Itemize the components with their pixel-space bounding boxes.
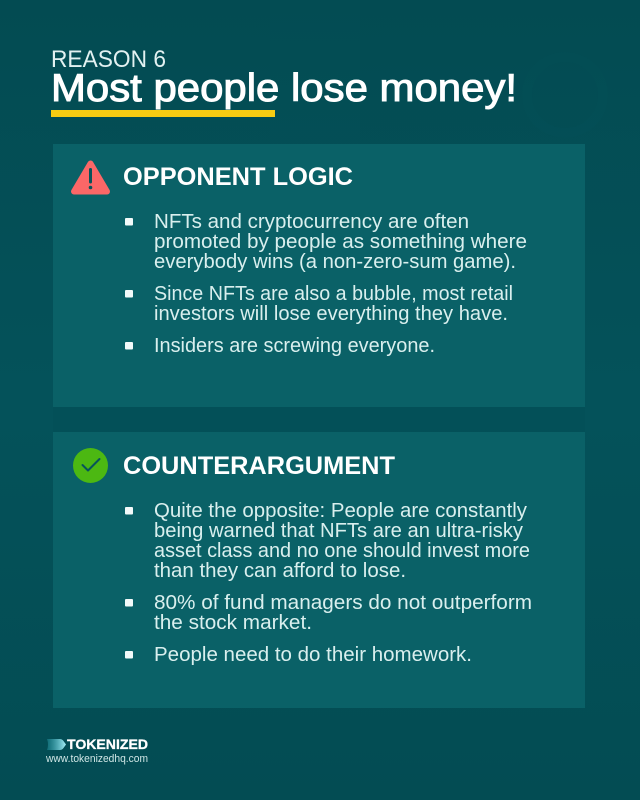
bullet list: opponent logic: Since NFTs are also a bubble, most retail <box>154 283 513 305</box>
bullet list: counterargument: People need to do their homework. <box>154 644 472 666</box>
title block <box>51 46 517 117</box>
bullet list: counterargument: being warned that NFTs are an ultra-risky <box>154 520 523 542</box>
heading: opponent logic: OPPONENT LOGIC <box>123 163 353 191</box>
bullet list: counterargument: asset class and no one should invest more <box>154 540 530 562</box>
kicker: reason 6: REASON 6 <box>51 46 166 73</box>
bullet list: counterargument <box>125 500 532 666</box>
icon: tokenized logo mark <box>47 739 66 750</box>
bullet list: opponent logic: investors will lose everything they have. <box>154 303 508 325</box>
panel: counterargument <box>53 432 585 708</box>
panel: opponent logic <box>53 144 585 407</box>
bullet list: counterargument: 80% of fund managers do not outperform <box>154 592 532 614</box>
bullet list: counterargument: Quite the opposite: People are constantly <box>154 500 527 522</box>
logo wordmark: TOKENIZED <box>67 736 148 752</box>
heading: Most people lose money! <box>51 67 517 110</box>
yellow underline <box>51 110 275 117</box>
bullet list: opponent logic: Insiders are screwing everyone. <box>154 335 435 357</box>
bullet list: opponent logic <box>125 211 527 357</box>
icon: warning triangle <box>74 164 107 192</box>
icon: green check circle <box>73 448 108 483</box>
bullet list: opponent logic: everybody wins (a non-zero-sum game). <box>154 251 516 273</box>
bullet list: opponent logic: NFTs and cryptocurrency are often <box>154 211 469 233</box>
heading: counterargument: COUNTERARGUMENT <box>123 452 395 480</box>
footer logo and url <box>45 736 148 765</box>
bullet list: counterargument: than they can afford to lose. <box>154 560 406 582</box>
bullet list: opponent logic: promoted by people as something where <box>154 231 527 253</box>
website url: www.tokenizedhq.com <box>45 753 148 765</box>
bullet list: counterargument: the stock market. <box>154 612 312 634</box>
